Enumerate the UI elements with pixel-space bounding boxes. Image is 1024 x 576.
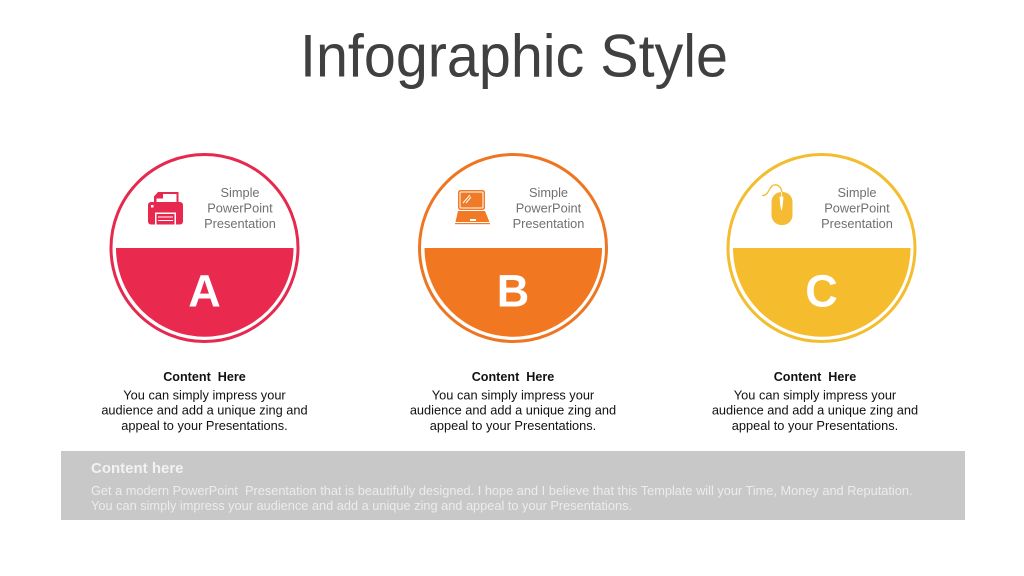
title: Infographic Style (300, 22, 728, 90)
circle B label: Simple (529, 185, 568, 200)
text block: column A: You can simply impress your (123, 388, 286, 402)
text block: column C: Content Here (774, 370, 856, 384)
circle C label: Presentation (821, 216, 893, 231)
icon: printer (148, 192, 183, 226)
text block: column B: You can simply impress your (432, 388, 595, 402)
text block: column B (410, 370, 616, 433)
circle B label: PowerPoint (516, 200, 582, 216)
banner heading: Content here (91, 460, 184, 477)
panel: circle A (111, 154, 298, 342)
icon: mouse (762, 185, 792, 225)
text block: column A: appeal to your Presentations. (121, 418, 288, 433)
text block: column C: appeal to your Presentations. (732, 418, 898, 433)
text block: column A: audience and add a unique zing and (101, 402, 308, 418)
circle B label: Presentation (513, 216, 584, 231)
circle A label: Simple (220, 185, 260, 200)
banner text: You can simply impress your audience and add a unique zing and appeal to your Presentations. (91, 498, 632, 513)
letter C: C (805, 266, 838, 316)
text block: column C (712, 370, 918, 433)
text block: column C: audience and add a unique zing and (712, 402, 918, 418)
icon: laptop (455, 190, 490, 224)
text block: column C: You can simply impress your (734, 388, 897, 402)
circle A label: Presentation (204, 216, 276, 231)
banner text: Get a modern PowerPoint Presentation that is beautifully designed. I hope and I believe that this Template will your Time, Money and Reputation. (91, 483, 912, 498)
circle A label: PowerPoint (207, 200, 273, 216)
text block: column A: Content Here (163, 370, 246, 384)
text block: column B: appeal to your Presentations. (430, 418, 596, 433)
text block: column B: Content Here (472, 370, 554, 384)
text block: column B: audience and add a unique zing and (410, 402, 616, 418)
circle C label: Simple (837, 185, 877, 200)
letter B: B (497, 266, 529, 316)
text block: column A (101, 370, 308, 433)
panel: bottom banner (61, 451, 965, 520)
panel: circle B (420, 154, 606, 342)
circle C label: PowerPoint (824, 200, 890, 216)
panel: circle C (728, 154, 915, 342)
letter A: A (188, 266, 221, 316)
